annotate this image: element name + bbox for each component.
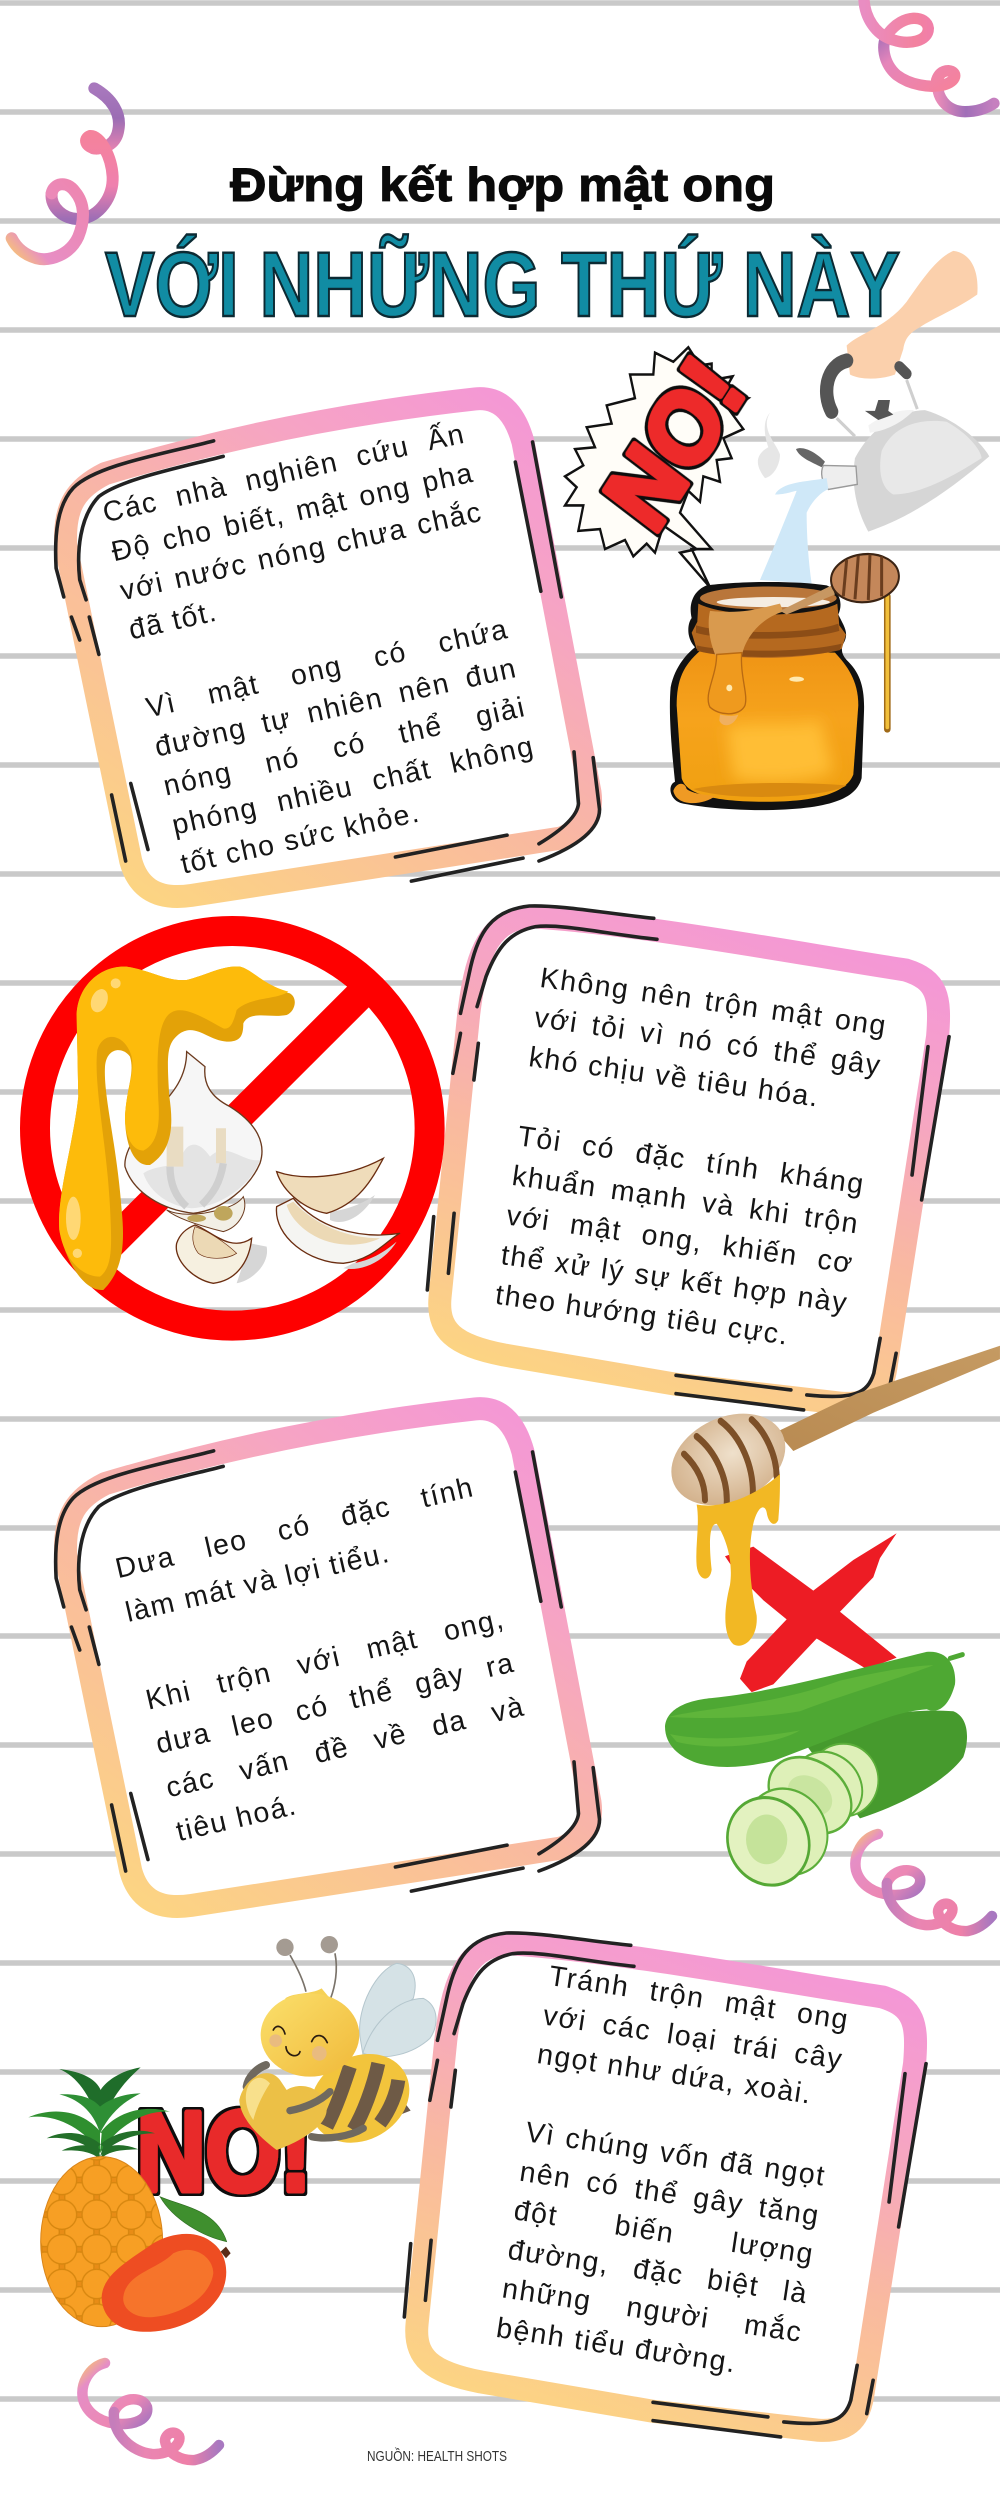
- text: hot water warning: Độ cho biết, mật ong pha: [108, 457, 476, 568]
- panel: hot water text card: [54, 387, 602, 908]
- icon: steel kettle: [796, 361, 989, 532]
- icon: pineapple: [28, 2067, 170, 2327]
- swirl: bottom left ribbon: [82, 2363, 219, 2460]
- text: sweet fruit warning: đường, đặc biệt là: [506, 2234, 811, 2310]
- text: hot water warning: đã tốt.: [126, 595, 220, 646]
- icon: cucumbers with slices: [665, 1652, 967, 1900]
- text: sweet fruit warning: với các loại trái cây: [541, 1999, 846, 2076]
- text: garlic warning: Không nên trộn mật ong: [538, 962, 889, 1043]
- text: hot water warning: nóng nó có thể giải: [160, 691, 528, 802]
- icon: garlic bulb: [125, 1052, 262, 1232]
- text: garlic warning: theo hướng tiêu cực.: [493, 1279, 791, 1352]
- text: hot water warning: [100, 418, 537, 880]
- panel: sweet fruit text card: [402, 1931, 928, 2442]
- text: hot water warning: Các nhà nghiên cứu Ấn: [100, 418, 468, 529]
- illustration: bee, NO sign, pineapple and mango: [28, 1936, 436, 2332]
- swirl: top right ribbon: [864, 0, 994, 112]
- icon: poured water: [760, 478, 828, 584]
- text: garlic warning: thể xử lý sự kết hợp này: [499, 1240, 850, 1320]
- icon: honey jar: [670, 551, 901, 810]
- text: hot water warning: với nước nóng chưa chắc: [117, 496, 485, 607]
- card frame: gradient border with black sketch strokes: [54, 1397, 602, 1918]
- text: garlic warning: với tỏi vì nó có thể gây: [532, 1002, 883, 1082]
- panel: cucumber text card: [54, 1397, 602, 1918]
- text: sweet fruit warning: Vì chúng vốn đã ngọt: [524, 2117, 828, 2193]
- text: NO sign: NO!: [137, 2089, 312, 2216]
- text: sweet fruit warning: ngọt như dứa, xoài.: [535, 2038, 815, 2111]
- text: sweet fruit warning: bệnh tiểu đường.: [495, 2312, 739, 2379]
- text: hot water warning: tốt cho sức khỏe.: [177, 796, 423, 880]
- swirl: top left ribbon: [12, 88, 119, 259]
- text: cucumber warning: [112, 1471, 528, 1848]
- text: cucumber warning: làm mát và lợi tiểu.: [122, 1537, 393, 1629]
- text: sweet fruit warning: những người mắc: [500, 2273, 805, 2349]
- text: hot water warning: phóng nhiều chất không: [169, 730, 537, 841]
- text: cucumber warning: Khi trộn với mật ong,: [143, 1603, 507, 1717]
- text: cucumber warning: các vấn đề về da và: [163, 1691, 528, 1804]
- card frame: gradient border with black sketch strokes: [426, 904, 951, 1412]
- illustration: garlic in prohibition sign under honey: [35, 931, 430, 1326]
- text: sweet fruit warning: Tránh trộn mật ong: [547, 1960, 852, 2037]
- icon: bee hugging heart: [239, 1936, 436, 2160]
- text: cucumber warning: Dưa leo có đặc tính: [112, 1471, 477, 1585]
- icon: red prohibition ring and slash: [35, 931, 430, 1326]
- source credit: NGUỒN: HEALTH SHOTS: [367, 2447, 507, 2465]
- text: garlic warning: với mật ong, khiến cơ: [505, 1200, 856, 1280]
- card frame: gradient border with black sketch strokes: [54, 387, 602, 908]
- icon: honey dipper: [661, 1346, 1000, 1521]
- text: sweet fruit warning: nên có thể gây tăng: [518, 2156, 822, 2232]
- icon: dripping honey: [59, 966, 295, 1290]
- icon: red brush cross: [725, 1533, 897, 1692]
- text: sweet fruit warning: đột biến lượng: [512, 2195, 816, 2271]
- icon: arm holding kettle: [847, 251, 978, 379]
- text: cucumber warning: dưa leo có thể gây ra: [153, 1647, 518, 1761]
- illustration: honey dipper, red cross and cucumbers: [661, 1346, 1000, 1900]
- text: sweet fruit warning: [495, 1960, 852, 2379]
- title: line one: Đừng kết hợp mật ong: [230, 158, 775, 211]
- icon: NO speech burst: NO!: [585, 338, 764, 549]
- text: garlic warning: [493, 962, 889, 1352]
- text: hot water warning: đường tự nhiên nên đun: [151, 652, 520, 763]
- text: garlic warning: Tỏi có đặc tính kháng: [516, 1121, 867, 1201]
- icon: mango with leaf: [102, 2197, 231, 2332]
- icon: garlic cloves: [176, 1158, 400, 1283]
- text: garlic warning: khuẩn mạnh và khi trộn: [510, 1160, 861, 1241]
- card frame: gradient border with black sketch strokes: [402, 1931, 928, 2442]
- text: cucumber warning: tiêu hoá.: [173, 1789, 300, 1848]
- icon: dripping honey strands: [696, 1474, 780, 1646]
- swirl: right ribbon by cucumber: [855, 1834, 992, 1931]
- icon: steam: [758, 413, 780, 478]
- text: garlic warning: khó chịu về tiêu hóa.: [527, 1041, 821, 1114]
- panel: garlic text card: [426, 904, 951, 1412]
- illustration: kettle, NO burst and honey jar: [565, 251, 989, 810]
- text: hot water warning: Vì mật ong có chứa: [143, 613, 511, 724]
